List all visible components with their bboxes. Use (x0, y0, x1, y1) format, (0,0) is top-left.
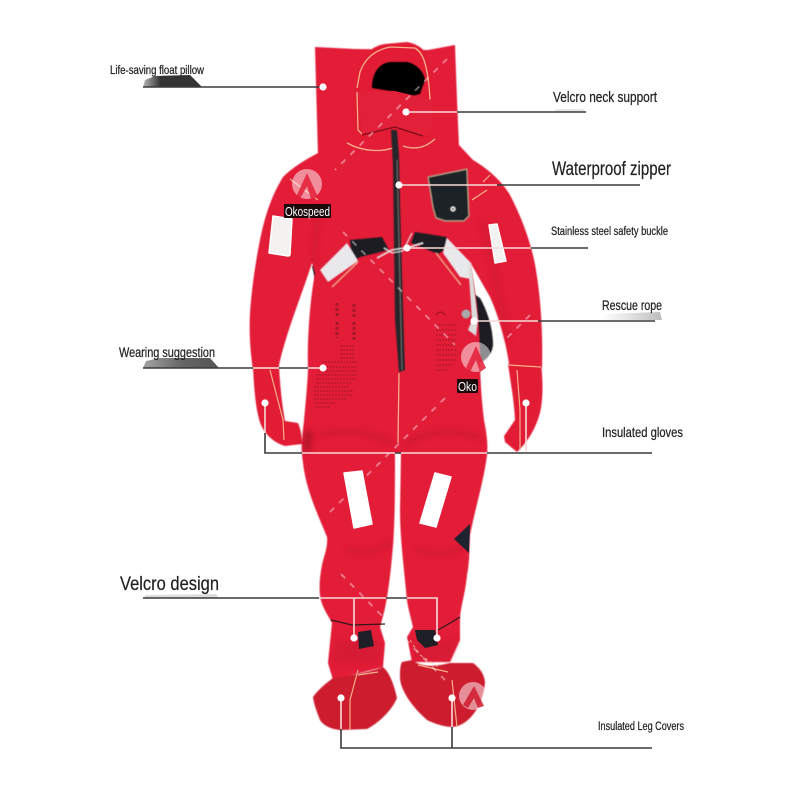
watermark dashes (330, 59, 530, 680)
rescue rope clip (462, 262, 478, 336)
right boot (400, 660, 485, 727)
watermark text: Oko: Oko (458, 379, 477, 394)
label: insulated leg covers: Insulated Leg Covers (598, 721, 684, 733)
label: stainless steel safety buckle: Stainless steel safety buckle (551, 226, 668, 238)
torso, arms and legs (250, 138, 542, 680)
left glove (253, 366, 302, 446)
label backing: velcro neck support (553, 109, 585, 112)
label: insulated gloves: Insulated gloves (602, 424, 683, 440)
hood seams (347, 47, 435, 151)
reflective patch: right arm (489, 224, 506, 263)
hood chin flap (358, 91, 432, 136)
left boot (313, 667, 397, 730)
label backing: life-saving float pillow (143, 75, 202, 87)
leader: insulated leg covers (337, 694, 652, 748)
leader: insulated gloves (261, 399, 652, 453)
leader: life-saving float pillow (143, 83, 327, 91)
reflective patch: left arm (269, 216, 292, 256)
center leg seam (398, 373, 399, 443)
leader: stainless steel safety buckle (403, 244, 588, 252)
label: life-saving float pillow: Life-saving float pillow (110, 65, 205, 77)
label backing: velcro design (143, 594, 219, 598)
float pillow (315, 45, 459, 170)
reflective patch: left leg (344, 471, 372, 528)
hood face opening (372, 62, 425, 96)
leader: waterproof zipper (395, 181, 640, 189)
rope pouch behind body (468, 290, 493, 364)
watermark logo: boot (459, 682, 487, 710)
label: velcro design: Velcro design (120, 574, 219, 595)
label: rescue rope: Rescue rope (602, 298, 662, 313)
leader: rescue rope (470, 317, 655, 325)
label: waterproof zipper: Waterproof zipper (552, 159, 672, 180)
watermark text: Okospeed: Okospeed (285, 204, 330, 219)
label: velcro neck support: Velcro neck support (553, 90, 657, 106)
zipper (391, 130, 405, 372)
label: wearing suggestion: Wearing suggestion (119, 345, 215, 360)
suit body (250, 42, 542, 730)
label backing: wearing suggestion (143, 358, 219, 368)
watermark logo: hip (461, 342, 491, 372)
arm and glove seams (253, 175, 541, 730)
knee patch (454, 524, 470, 553)
shading on suit (303, 205, 508, 664)
ankle velcro straps (331, 617, 460, 668)
chest harness and reflective bands (320, 232, 471, 287)
reflective patch: right leg (420, 473, 451, 527)
right glove (504, 364, 542, 452)
leader: velcro design (143, 598, 441, 642)
label backing: rescue rope (600, 312, 662, 320)
watermark logo: shoulder (292, 169, 322, 199)
hood (352, 42, 434, 150)
leader: wearing suggestion (143, 364, 327, 372)
strap behind left arm (312, 264, 328, 284)
chest pocket (428, 169, 469, 221)
printed instructions (314, 303, 458, 407)
leader: velcro neck support (402, 108, 586, 116)
